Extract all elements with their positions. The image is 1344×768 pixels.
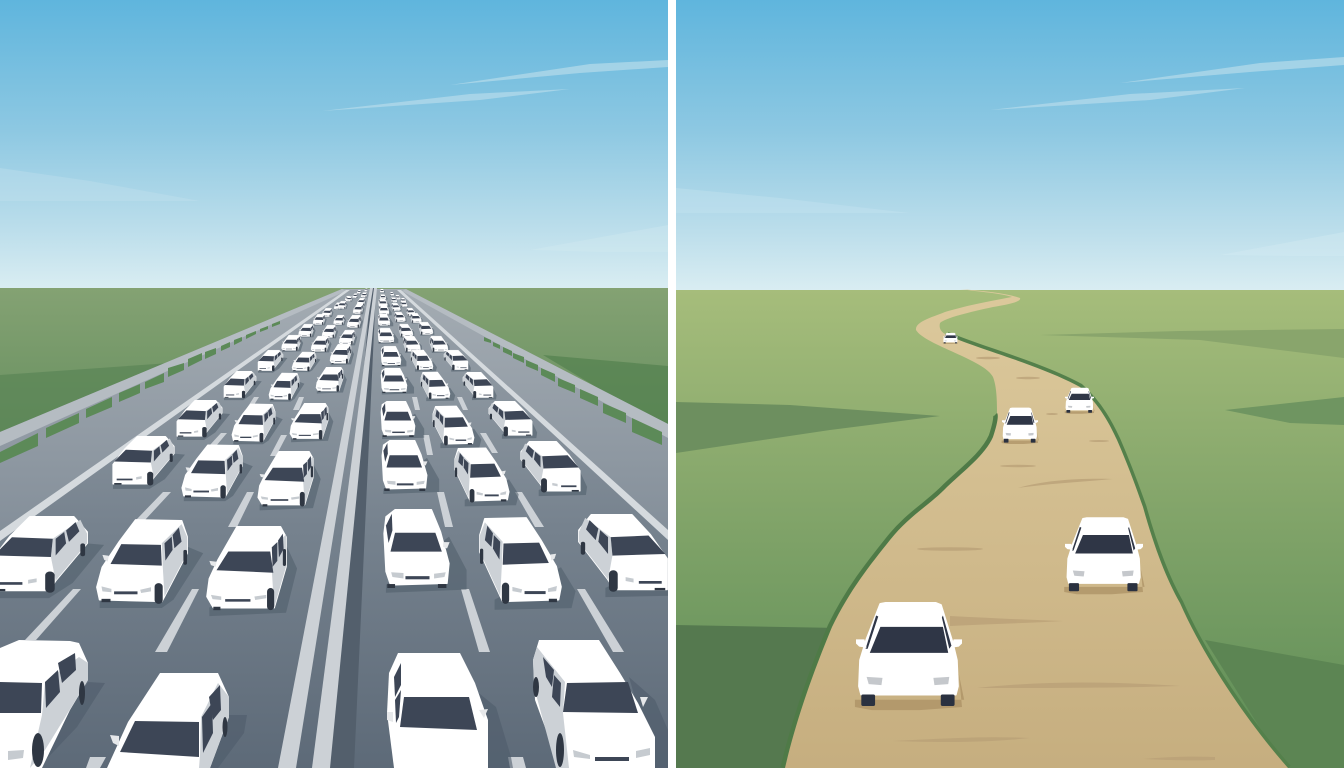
carriageway surface [0,290,668,768]
row 3: cars [113,436,587,510]
panel: congested highway [0,0,678,768]
guardrail left [0,289,346,463]
sky: highway panel [0,0,668,288]
edge line left [0,290,350,541]
car: nearest second lane (cut off by frame) [107,673,247,768]
lane dashes [25,397,624,768]
row 6: cars [258,344,471,373]
guardrail right [402,289,668,445]
field shading patches [676,329,1344,768]
car: nearest left lane (cut off by frame) [0,640,105,768]
car: nearest third lane (cut off by frame) [387,653,513,768]
panel: open country road [676,0,1344,768]
cars: highway traffic [0,289,678,768]
cars: country road [855,333,1145,710]
row 4: cars [177,400,537,448]
car: farthest [943,333,958,344]
car: nearest right lane (cut off by frame) [533,640,668,768]
car: nearest [855,603,964,710]
road edge shading right [947,335,1288,768]
grass: highway panel [0,288,668,478]
clouds: country panel [676,57,1344,256]
median: dark strip and double white lines [278,288,377,768]
panel divider [668,0,676,768]
row: far cars [282,304,450,353]
car: far right [1065,388,1095,414]
road ruts and streaks [893,357,1215,760]
row 5: cars [224,367,497,402]
road edge shading left [785,413,998,768]
row 2: cars [0,510,678,616]
road deck [0,289,668,768]
edge line right [397,290,668,540]
row: tiny distant cars [322,289,416,318]
dirt road [785,289,1288,768]
grass: country panel [676,290,1344,768]
car: middle [1002,408,1039,444]
sky: country panel [676,0,1344,290]
clouds: highway panel [0,60,668,252]
car: near right [1064,518,1145,594]
